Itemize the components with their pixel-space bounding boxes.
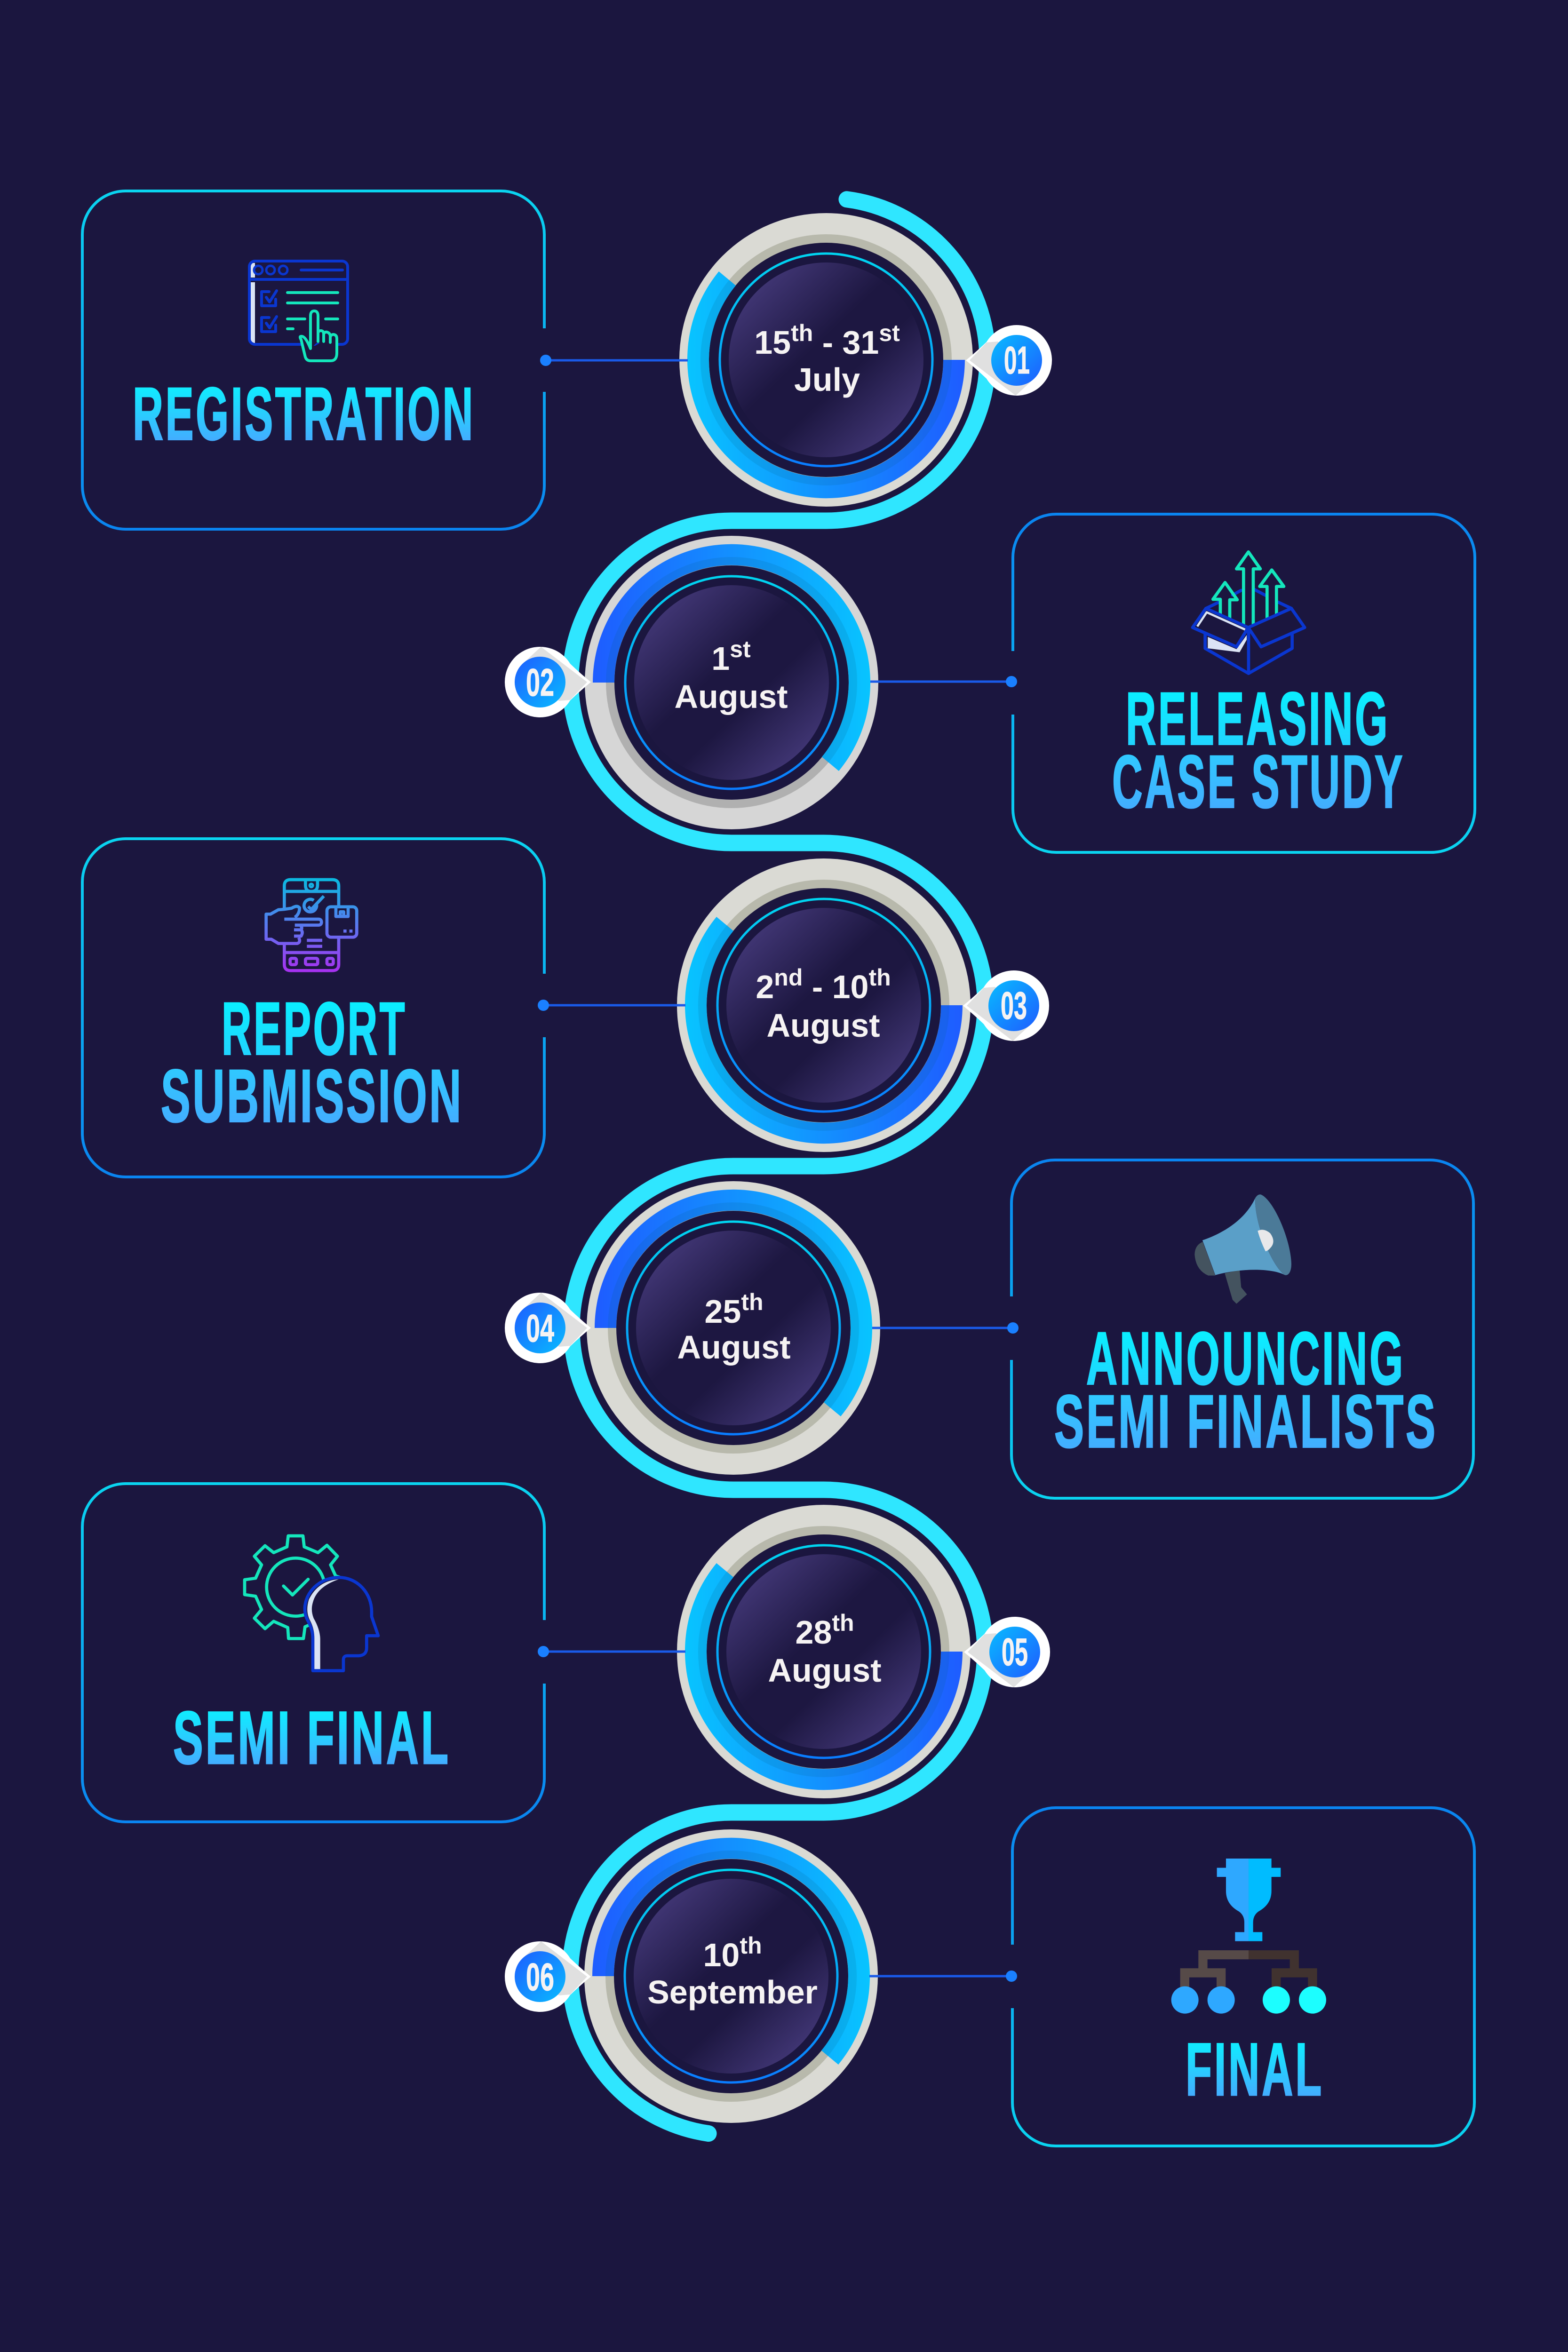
icon: checklist window with pointing hand	[249, 261, 348, 361]
icon: megaphone	[1194, 1194, 1291, 1304]
step 1 date text: 15	[754, 324, 791, 361]
icon: trophy and bracket	[1171, 1859, 1326, 2014]
panel: report submission	[82, 839, 685, 1177]
step 2 date text: 1	[711, 640, 730, 677]
step 2 date text: August	[674, 678, 788, 715]
step 3 date text: August	[766, 1007, 880, 1044]
step 3 date circle	[677, 858, 971, 1152]
step 4 date text: August	[677, 1329, 791, 1366]
step 4 date text: 25	[704, 1293, 741, 1330]
step 5 date circle	[677, 1505, 971, 1798]
step 1 number badge	[966, 325, 1052, 396]
panel: announcing semi finalists	[872, 1160, 1473, 1498]
step 1 date text: - 31	[813, 324, 879, 361]
step 1 date text: July	[794, 361, 860, 398]
step 4 number: 04	[526, 1306, 554, 1350]
icon: gear and head	[245, 1536, 378, 1671]
step 4 date circle	[587, 1181, 880, 1475]
step 5 number badge	[964, 1617, 1050, 1687]
step 4 date text: th	[741, 1289, 764, 1315]
step 3 number badge: 03	[1001, 984, 1027, 1027]
step 2 number badge	[505, 647, 591, 717]
panel: registration	[82, 191, 688, 529]
panel: semi final	[82, 1484, 685, 1822]
step 1 date circle	[679, 213, 973, 507]
step 3 date text: th	[868, 964, 891, 991]
step 2 number: 02	[526, 660, 554, 704]
step 6 date text: September	[647, 1974, 818, 2010]
step 4 number badge	[505, 1293, 591, 1363]
step 1 date text: st	[879, 320, 900, 346]
step 3 date text: nd	[774, 964, 803, 991]
step 6 number badge	[505, 1941, 591, 2012]
step 1 date text: th	[791, 320, 813, 346]
winding timeline path	[570, 199, 987, 2134]
step 3 date text: 2	[756, 969, 774, 1005]
icon: phone with hand and parcel	[266, 880, 357, 970]
panel: final	[869, 1808, 1474, 2146]
heading line 2: SUBMISSION	[161, 1054, 463, 1137]
heading: REGISTRATION	[133, 372, 475, 455]
step 2 date circle	[585, 536, 878, 829]
step 6 number: 06	[526, 1955, 554, 1999]
panel: releasing case study	[870, 514, 1475, 852]
heading: FINAL	[1186, 2027, 1324, 2111]
step 6 date circle	[584, 1829, 878, 2123]
step 3 number badge	[963, 970, 1049, 1041]
step 5 date text: th	[832, 1610, 854, 1636]
step 6 date text: 10	[703, 1937, 740, 1973]
step 5 number badge: 05	[1002, 1630, 1028, 1674]
heading: SEMI FINAL	[173, 1696, 451, 1780]
step 3 date text: - 10	[803, 969, 868, 1005]
step 5 date text: 28	[795, 1614, 832, 1651]
step 6 date text: th	[740, 1932, 762, 1959]
heading line 1: REPORT	[222, 987, 407, 1071]
step 5 date text: August	[768, 1652, 882, 1689]
step 2 date text: st	[730, 636, 751, 662]
icon: open box with arrows	[1193, 552, 1305, 674]
step 1 number badge: 01	[1004, 338, 1030, 382]
